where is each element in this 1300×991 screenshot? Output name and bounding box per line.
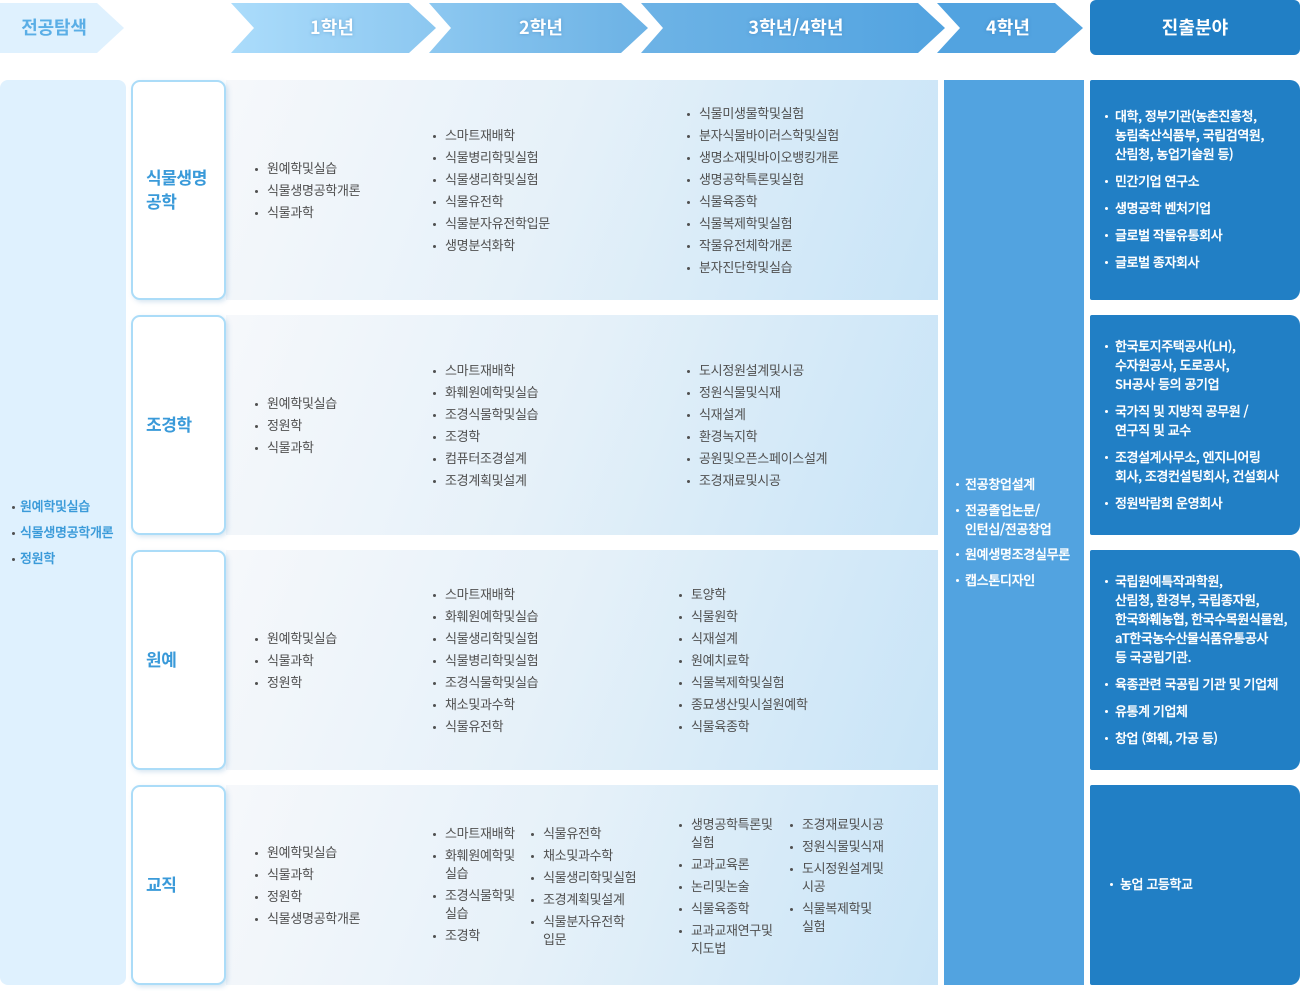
1학년 courses: [255, 845, 360, 926]
2학년 courses: [433, 587, 538, 734]
list: careers: 농업 고등학교: [1120, 874, 1193, 892]
2학년 courses, left: 실습: [445, 866, 468, 881]
major label: [131, 785, 226, 985]
3,4학년 courses, left: 교과교재연구및: [691, 923, 773, 938]
list: 4학년 courses: 전공졸업논문/: [965, 500, 1040, 518]
list: careers: 유통계 기업체: [1115, 700, 1188, 720]
list: 4학년 courses: 전공창업설계: [965, 474, 1035, 492]
list: careers: 산림청, 농업기술원 등): [1115, 144, 1233, 162]
row: 식물생명공학: [131, 80, 938, 304]
panel: 진출분야 교직: [1090, 785, 1300, 985]
2학년 courses, right: 입문: [543, 932, 566, 947]
course background: [226, 315, 938, 535]
1학년 courses: 정원학: [267, 418, 302, 433]
3,4학년 courses: 식물복제학및실험: [691, 675, 784, 690]
3,4학년 courses: 도시정원설계및시공: [699, 363, 804, 378]
arrow: 2학년: [429, 3, 648, 53]
2학년 courses: 식물생리학및실험: [445, 631, 538, 646]
list: careers: 생명공학 벤처기업: [1115, 198, 1211, 216]
3,4학년 courses: 종묘생산및시설원예학: [691, 697, 808, 712]
2학년 courses: 스마트재배학: [445, 587, 515, 602]
3,4학년 courses, left: 논리및논술: [691, 879, 749, 894]
list: careers: 국가직 및 지방직 공무원 /: [1115, 400, 1248, 420]
list: 전공탐색 courses: [12, 499, 114, 566]
2학년 courses: 채소및과수학: [445, 697, 515, 712]
3,4학년 courses: 식재설계: [691, 631, 738, 646]
list: careers: 창업 (화훼, 가공 등): [1115, 728, 1218, 746]
list: careers: 수자원공사, 도로공사,: [1115, 354, 1229, 374]
list: careers: 대학, 정부기관(농촌진흥청,: [1115, 106, 1257, 124]
2학년 courses: 식물유전학: [445, 194, 503, 209]
2학년 courses, right: 조경계획및설계: [543, 892, 625, 907]
3,4학년 courses: 식물미생물학및실험: [699, 106, 804, 121]
2학년 courses, left: 화훼원예학및: [445, 848, 515, 863]
major label: [131, 550, 226, 770]
2학년 courses: 조경학: [445, 429, 480, 444]
2학년 courses: 스마트재배학: [445, 363, 515, 378]
3,4학년 courses, right: 정원식물및식재: [802, 839, 884, 854]
2학년 courses, right: 식물분자유전학: [543, 914, 625, 929]
3,4학년 courses, right: 도시정원설계및: [802, 861, 884, 876]
3,4학년 courses: 식재설계: [699, 407, 746, 422]
list: careers: [1105, 336, 1279, 512]
3,4학년 courses: 토양학: [691, 587, 726, 602]
3,4학년 courses: 분자진단학및실습: [699, 260, 792, 275]
3,4학년 courses, left: 교과교육론: [691, 857, 749, 872]
list: careers: 조경설계사무소, 엔지니어링: [1115, 446, 1260, 466]
panel: 진출분야 원예: [1090, 550, 1300, 770]
2학년 courses: [433, 128, 550, 253]
heading: 전공탐색: 전공탐색: [21, 14, 87, 40]
2학년 courses, right: 식물생리학및실험: [543, 870, 636, 885]
list: careers: 한국토지주택공사(LH),: [1115, 336, 1236, 354]
list: careers: 글로벌 작물유통회사: [1115, 224, 1222, 244]
3,4학년 courses: 분자식물바이러스학및실험: [699, 128, 839, 143]
list: 4학년 courses: 캡스톤디자인: [965, 570, 1035, 588]
3,4학년 courses: [679, 587, 808, 734]
2학년 courses: 조경식물학및실습: [445, 675, 538, 690]
1학년 courses: 식물과학: [267, 867, 314, 882]
list: 4학년 courses: 인턴십/전공창업: [965, 518, 1051, 538]
panel: 전공탐색 column: [0, 80, 126, 985]
heading: 진출분야: 진출분야: [1162, 14, 1228, 40]
3,4학년 courses: 공원및오픈스페이스설계: [699, 451, 827, 466]
header arrows: [0, 3, 1083, 53]
list: 전공탐색 courses: 식물생명공학개론: [20, 525, 113, 540]
list: careers: SH공사 등의 공기업: [1115, 374, 1219, 392]
heading: 4학년: 4학년: [986, 14, 1030, 40]
row: 조경학: [131, 315, 938, 539]
course background: [226, 550, 938, 770]
3,4학년 courses: 식물원학: [691, 609, 738, 624]
major label: 교직: [146, 876, 176, 895]
3,4학년 courses: 조경재료및시공: [699, 473, 781, 488]
3,4학년 courses, right: 식물복제학및: [802, 901, 872, 916]
list: 4학년 courses: 원예생명조경실무론: [965, 544, 1070, 563]
arrow: 1학년: [231, 3, 436, 53]
2학년 courses, left: [433, 826, 515, 943]
3,4학년 courses: 정원식물및식재: [699, 385, 781, 400]
list: careers: 육종관련 국공립 기관 및 기업체: [1115, 674, 1278, 692]
1학년 courses: 식물생명공학개론: [267, 911, 360, 926]
heading: 3학년/4학년: 3학년/4학년: [748, 14, 844, 40]
list: careers: 회사, 조경컨설팅회사, 건설회사: [1115, 466, 1279, 484]
2학년 courses: 식물생리학및실험: [445, 172, 538, 187]
list: careers: 국립원예특작과학원,: [1115, 570, 1223, 590]
2학년 courses, right: [531, 826, 636, 947]
2학년 courses: 식물분자유전학입문: [445, 216, 550, 231]
arrow: 4학년: [937, 3, 1083, 53]
1학년 courses: 원예학및실습: [267, 631, 337, 646]
1학년 courses: [255, 631, 337, 690]
1학년 courses: 원예학및실습: [267, 161, 337, 176]
major label: 원예: [146, 651, 176, 670]
1학년 courses: [255, 161, 360, 220]
list: careers: 농림축산식품부, 국립검역원,: [1115, 124, 1264, 144]
1학년 courses: 식물과학: [267, 440, 314, 455]
course background: [226, 785, 938, 985]
1학년 courses: 원예학및실습: [267, 396, 337, 411]
2학년 courses: 조경계획및설계: [445, 473, 527, 488]
3,4학년 courses, left: 실험: [691, 835, 714, 850]
3,4학년 courses: [687, 363, 827, 488]
2학년 courses: 화훼원예학및실습: [445, 609, 538, 624]
major label: 식물생명: [146, 169, 207, 188]
2학년 courses: 조경식물학및실습: [445, 407, 538, 422]
panel: 진출분야 식물생명공학: [1090, 80, 1300, 300]
2학년 courses: 컴퓨터조경설계: [445, 451, 527, 466]
list: careers: 정원박람회 운영회사: [1115, 492, 1222, 512]
list: careers: [1105, 106, 1264, 270]
3,4학년 courses, right: 실험: [802, 919, 825, 934]
2학년 courses, left: 조경학: [445, 928, 480, 943]
1학년 courses: 식물과학: [267, 653, 314, 668]
3,4학년 courses, right: [790, 817, 884, 934]
arrow: 전공탐색: [0, 3, 124, 53]
course background: [226, 80, 938, 300]
1학년 courses: 원예학및실습: [267, 845, 337, 860]
3,4학년 courses: 생명소재및바이오뱅킹개론: [699, 150, 839, 165]
major label: [131, 80, 226, 300]
row: 교직: [131, 785, 938, 989]
heading: 2학년: 2학년: [519, 14, 563, 40]
3,4학년 courses, left: 생명공학특론및: [691, 817, 773, 832]
major label: [131, 315, 226, 535]
3,4학년 courses: 식물육종학: [691, 719, 749, 734]
list: careers: 글로벌 종자회사: [1115, 252, 1199, 270]
2학년 courses: 식물유전학: [445, 719, 503, 734]
2학년 courses: 스마트재배학: [445, 128, 515, 143]
panel: 4학년 column: [944, 80, 1084, 985]
2학년 courses, left: 조경식물학및: [445, 888, 515, 903]
3,4학년 courses: 식물육종학: [699, 194, 757, 209]
2학년 courses: 화훼원예학및실습: [445, 385, 538, 400]
1학년 courses: 정원학: [267, 675, 302, 690]
3,4학년 courses, left: 지도법: [691, 941, 726, 956]
panel: 진출분야 조경학: [1090, 315, 1300, 535]
list: 전공탐색 courses: 정원학: [20, 551, 55, 566]
1학년 courses: 식물과학: [267, 205, 314, 220]
2학년 courses: 식물병리학및실험: [445, 653, 538, 668]
list: careers: [1105, 570, 1287, 746]
list: 전공탐색 courses: 원예학및실습: [20, 499, 90, 514]
3,4학년 courses, right: 시공: [802, 879, 825, 894]
list: careers: 한국화훼농협, 한국수목원식물원,: [1115, 608, 1287, 628]
list: 4학년 courses: [956, 474, 1070, 588]
2학년 courses, left: 실습: [445, 906, 468, 921]
list: careers: 산림청, 환경부, 국립종자원,: [1115, 590, 1259, 608]
3,4학년 courses: [687, 106, 839, 275]
2학년 courses: [433, 363, 538, 488]
1학년 courses: 정원학: [267, 889, 302, 904]
list: careers: 등 국공립기관.: [1115, 646, 1191, 666]
2학년 courses: 식물병리학및실험: [445, 150, 538, 165]
2학년 courses: 생명분석화학: [445, 238, 515, 253]
3,4학년 courses: 생명공학특론및실험: [699, 172, 804, 187]
2학년 courses, right: 채소및과수학: [543, 848, 613, 863]
arrow: 3학년/4학년: [641, 3, 945, 53]
row: 원예: [131, 550, 938, 774]
list: careers: 민간기업 연구소: [1115, 170, 1199, 190]
major label: 조경학: [146, 416, 192, 435]
2학년 courses, left: 스마트재배학: [445, 826, 515, 841]
3,4학년 courses, right: 조경재료및시공: [802, 817, 884, 832]
2학년 courses, right: 식물유전학: [543, 826, 601, 841]
heading: 진출분야: [1090, 0, 1300, 55]
list: careers: aT한국농수산물식품유통공사: [1115, 628, 1268, 646]
heading: 1학년: 1학년: [310, 14, 354, 40]
3,4학년 courses, left: 식물육종학: [691, 901, 749, 916]
3,4학년 courses: 작물유전체학개론: [699, 238, 792, 253]
major label: 공학: [146, 193, 176, 212]
3,4학년 courses, left: [679, 817, 773, 956]
1학년 courses: [255, 396, 337, 455]
3,4학년 courses: 환경녹지학: [699, 429, 757, 444]
3,4학년 courses: 식물복제학및실험: [699, 216, 792, 231]
1학년 courses: 식물생명공학개론: [267, 183, 360, 198]
list: careers: 연구직 및 교수: [1115, 420, 1191, 438]
3,4학년 courses: 원예치료학: [691, 653, 749, 668]
